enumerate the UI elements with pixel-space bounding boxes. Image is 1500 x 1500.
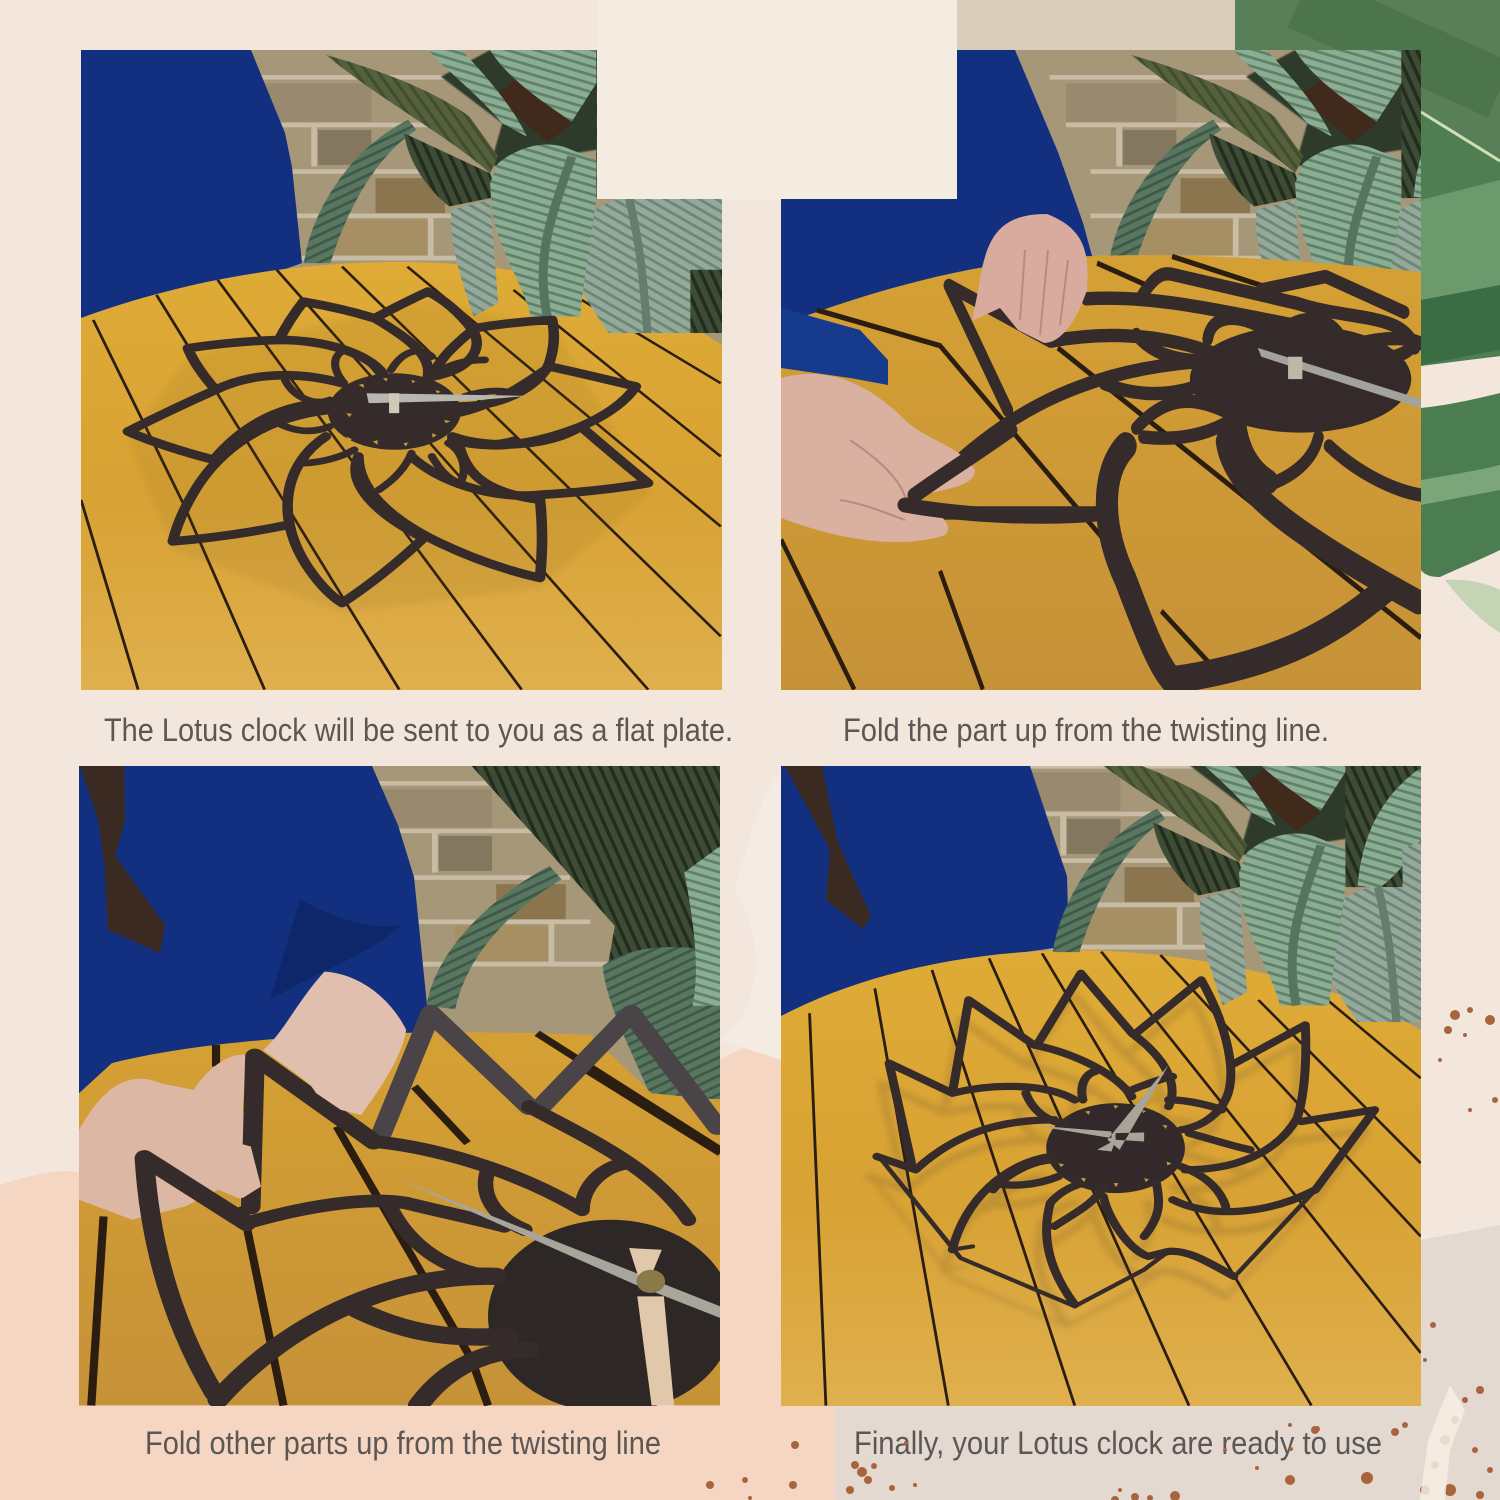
leaf: lower right: [1421, 393, 1500, 633]
clock shadow: [869, 993, 1366, 1326]
brick wall: [251, 50, 722, 345]
panel: step 4 finished clock photo: [748, 706, 1500, 1406]
lotus clock flat: [128, 292, 650, 613]
panel: step 2 folding photo: [781, 50, 1421, 690]
braid: [80, 766, 165, 953]
sleeve cuff: [781, 308, 888, 385]
large petal: [1107, 446, 1386, 680]
white card: top centre: [597, 0, 957, 199]
table slats: [781, 256, 1421, 690]
clock folded tips, far side: [382, 1013, 717, 1133]
panel: step 3 folding photo: [79, 766, 720, 1406]
fern plant: [304, 50, 722, 333]
clock hand: [1258, 348, 1421, 408]
table slats: [91, 1033, 720, 1406]
inner petal loops: [273, 350, 513, 490]
hand lower left: [781, 374, 975, 542]
thumb and finger: [177, 1126, 261, 1198]
brick wall: [1015, 50, 1421, 262]
leaf: upper right: [1235, 0, 1500, 366]
sweater: [81, 50, 302, 320]
clock spindle: [636, 1270, 665, 1293]
braid: [785, 766, 871, 929]
lower hand: [79, 1055, 261, 1220]
panel: step 1 flat plate photo: [81, 50, 722, 690]
clock petals: [877, 973, 1375, 1306]
wooden table: [79, 1032, 720, 1406]
sweater: [781, 50, 1094, 330]
hub hour notches: [1058, 1105, 1171, 1187]
caption 4: Finally, your Lotus clock are ready to use: [854, 1425, 1382, 1461]
fern plant: [1053, 739, 1471, 1022]
brick wall: [748, 706, 1500, 1172]
clock hub: [488, 1220, 733, 1413]
caption 1: The Lotus clock will be sent to you as a flat plate.: [104, 712, 733, 748]
sweater: [79, 766, 427, 1094]
peach wash: bottom left: [0, 1045, 835, 1500]
hub hour notches: [346, 378, 451, 446]
sweater fold shadow: [270, 900, 400, 1000]
clock hub: [1190, 326, 1411, 433]
sweater: [781, 766, 1069, 1016]
rose gold glitter: [706, 1007, 1498, 1500]
clock bands: [247, 1107, 688, 1276]
lower clock band over hand: [905, 430, 1108, 516]
fingers over clock: [300, 1037, 380, 1115]
brick wall: [372, 766, 720, 1100]
wooden table: [781, 255, 1421, 690]
table slats: [81, 267, 721, 690]
clock tips, near side: [144, 1057, 373, 1393]
upper hand: [263, 972, 406, 1115]
clock spindle: [1288, 357, 1302, 379]
clock petals: [128, 292, 648, 603]
clock minute hand: [392, 1176, 720, 1318]
clock shadow: [128, 300, 650, 613]
dark ferns: [427, 766, 720, 1099]
clock spindle: [389, 393, 399, 413]
lotus clock being folded: [940, 274, 1421, 680]
clock hub: [1046, 1103, 1185, 1193]
grey wash: bottom right: [835, 1225, 1500, 1500]
caption 3: Fold other parts up from the twisting line: [145, 1425, 661, 1461]
fern plant: [1110, 50, 1421, 272]
white glitter streak: [1420, 1385, 1465, 1500]
table slats: [810, 952, 1421, 1406]
clock hub: [328, 373, 461, 450]
caption 2: Fold the part up from the twisting line.: [843, 712, 1329, 748]
wooden table: [781, 950, 1421, 1406]
pale blob between lower panels: [720, 770, 781, 1060]
clock hands: [1034, 1065, 1169, 1151]
clock hour hand: [629, 1248, 674, 1406]
taupe strip: top: [957, 0, 1235, 50]
clock hand: [367, 393, 528, 403]
wooden table: [81, 262, 722, 690]
hand on top petal: [972, 214, 1088, 343]
clock bands: [940, 274, 1421, 513]
